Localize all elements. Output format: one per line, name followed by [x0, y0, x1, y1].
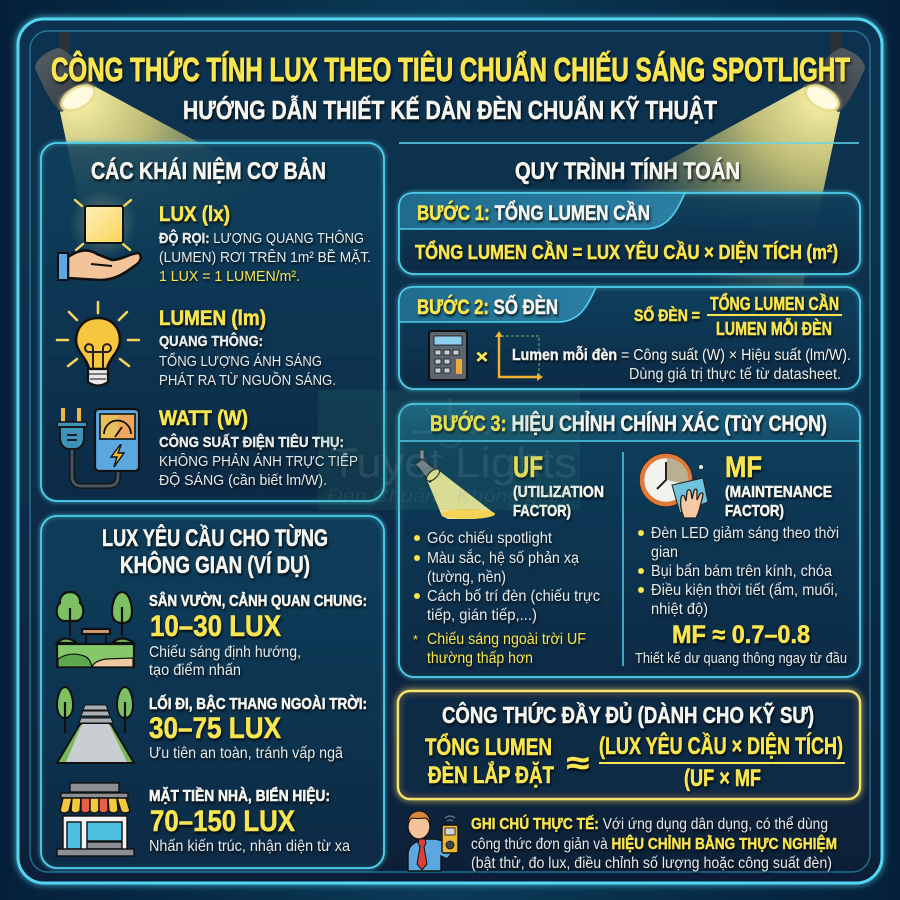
- multiply sign: ×: [476, 347, 488, 367]
- icon: axes: [495, 331, 543, 381]
- step 3 heading: BƯỚC 3: HIỆU CHỈNH CHÍNH XÁC (TùY CHỌN): [430, 411, 827, 436]
- text: MF factor: MF: [725, 451, 762, 484]
- step 2 formula: [634, 293, 842, 339]
- right spotlight beam: [480, 86, 840, 300]
- watermark: Đèn Chuẩn - Không gian: [327, 486, 567, 506]
- heading: required lux: LUX YÊU CẦU CHO TỪNG: [102, 524, 328, 552]
- watermark: Tuyet Lights: [330, 439, 577, 486]
- right spotlight fixture: [801, 32, 865, 116]
- icon: clock being wiped: [639, 453, 708, 518]
- text: lumen definition: PHÁT RA TỪ NGUỒN SÁNG.: [159, 371, 336, 389]
- step 2 lumen per lamp note: [512, 345, 851, 383]
- text: watt definition: ĐỘ SÁNG (cần biết lm/W).: [159, 472, 327, 489]
- text: facade lux: [149, 787, 350, 855]
- text: facade lux: Nhấn kiến trúc, nhận diện từ xa: [149, 838, 350, 855]
- list: UF items: *: [413, 632, 418, 647]
- text: lumen definition: QUANG THÔNG:: [159, 332, 263, 350]
- list: UF items: Góc chiếu spotlight: [427, 530, 553, 547]
- panel: basic concepts: [41, 143, 384, 501]
- left spotlight beam: [60, 86, 420, 300]
- list: UF items: (tường, nền): [427, 569, 506, 586]
- text: garden lux: 10–30 LUX: [150, 610, 281, 643]
- approximately sign: ≈: [567, 747, 589, 780]
- text: garden lux: SÂN VƯỜN, CẢNH QUAN CHUNG:: [149, 592, 367, 610]
- text: facade lux: 70–150 LUX: [150, 805, 295, 838]
- heading: basic concepts: CÁC KHÁI NIỆM CƠ BẢN: [91, 156, 326, 185]
- text: lux definition: [159, 203, 371, 285]
- practical note: công thức đơn giản và HIỆU CHỈNH BẰNG THỰC NGHIỆM: [471, 835, 837, 853]
- text: watt definition: CÔNG SUẤT ĐIỆN TIÊU THỤ:: [159, 433, 344, 451]
- practical note: [471, 815, 837, 872]
- list: MF items: Đèn LED giảm sáng theo thời: [651, 525, 839, 542]
- icon: plug and power meter: [57, 408, 139, 486]
- text: MF factor: (MAINTENANCE: [725, 484, 832, 501]
- text: lumen definition: [159, 307, 336, 389]
- full formula left side: [425, 733, 554, 789]
- text: watt definition: KHÔNG PHẢN ÁNH TRỰC TIẾP: [159, 453, 358, 470]
- text: lux definition: LUX (lx): [159, 203, 230, 226]
- list: UF items: Chiếu sáng ngoài trời UF: [427, 631, 586, 648]
- icon: light on hand: [58, 190, 141, 280]
- step 2 formula: TỔNG LUMEN CẦN: [710, 293, 839, 314]
- icon: engineer with lux meter: [408, 811, 458, 871]
- icon: outdoor path and stairs: [57, 687, 134, 763]
- full formula left side: TỔNG LUMEN: [425, 733, 552, 761]
- text: lux definition: 1 LUX = 1 LUMEN/m².: [159, 268, 300, 285]
- icon: storefront: [57, 783, 134, 856]
- panel: full formula: [398, 691, 860, 799]
- text: garden lux: Chiếu sáng định hướng,: [149, 644, 301, 661]
- step 1 header tab: [399, 193, 685, 229]
- practical note: (bật thử, đo lux, điều chỉnh số lượng hoặc công suất đèn): [471, 855, 832, 872]
- text: path lux: 30–75 LUX: [149, 712, 281, 745]
- full formula fraction: (UF × MF: [684, 765, 761, 792]
- subtitle: HƯỚNG DẪN THIẾT KẾ DÀN ĐÈN CHUẨN KỸ THUẬT: [183, 95, 717, 125]
- text: watt definition: WATT (W): [159, 407, 248, 430]
- step 2 header tab: [399, 287, 596, 322]
- text: path lux: Ưu tiên an toàn, tránh vấp ngã: [149, 745, 343, 762]
- watermark: [318, 390, 580, 510]
- practical note: GHI CHÚ THỰC TẾ: Với ứng dụng dân dụng, có thể dùng: [471, 815, 828, 833]
- text: MF factor: [725, 451, 832, 520]
- full formula heading: CÔNG THỨC ĐẦY ĐỦ (DÀNH CHO KỸ SƯ): [442, 700, 814, 728]
- text: lumen definition: TỔNG LƯỢNG ÁNH SÁNG: [159, 352, 322, 370]
- heading: required lux: KHÔNG GIAN (VÍ DỤ): [120, 551, 310, 579]
- MF design note: Thiết kế dư quang thông ngay từ đầu: [635, 651, 847, 667]
- step 2 heading: BƯỚC 2: SỐ ĐÈN: [417, 295, 558, 319]
- list: UF items: Màu sắc, hệ số phản xạ: [427, 548, 579, 567]
- icon: light bulb: [57, 302, 139, 386]
- list: MF items: gian: [651, 544, 678, 561]
- header divider above process column: [399, 142, 859, 144]
- left spotlight fixture: [35, 32, 99, 116]
- list: UF items: Cách bố trí đèn (chiếu trực: [427, 588, 600, 605]
- icon: garden: [57, 592, 134, 667]
- text: path lux: LỐI ĐI, BẬC THANG NGOÀI TRỜI:: [149, 695, 367, 713]
- text: watt definition: [159, 407, 358, 489]
- text: UF factor: (UTILIZATION: [513, 484, 604, 501]
- panel: step 2: [399, 287, 860, 389]
- step 2 lumen per lamp note: Lumen mỗi đèn = Công suất (W) × Hiệu suất (lm/W).: [512, 345, 851, 364]
- text: lux definition: ĐỘ RỌI: LƯỢNG QUANG THÔNG: [159, 229, 364, 247]
- text: garden lux: [149, 592, 367, 679]
- text: lux definition: (LUMEN) RƠI TRÊN 1m² BỀ MẶT.: [159, 249, 371, 266]
- text: lumen definition: LUMEN (lm): [159, 307, 266, 330]
- text: garden lux: tạo điểm nhấn: [149, 661, 241, 679]
- heading: calculation process: QUY TRÌNH TÍNH TOÁN: [515, 157, 740, 185]
- list: UF items: [413, 530, 600, 667]
- text: path lux: [149, 695, 367, 762]
- step 2 formula: SỐ ĐÈN =: [634, 305, 700, 325]
- list: MF items: nhiệt độ): [651, 601, 708, 618]
- list: MF items: Bụi bẩn bám trên kính, chóa: [651, 562, 832, 580]
- text: UF factor: [513, 451, 604, 520]
- step 2 formula: LUMEN MỖI ĐÈN: [716, 318, 832, 339]
- heading: required lux: [102, 524, 328, 579]
- full formula left side: ĐÈN LẮP ĐẶT: [428, 761, 554, 789]
- list: UF items: thường thấp hơn: [427, 650, 533, 667]
- step 3 header band: [400, 405, 859, 441]
- text: facade lux: MẶT TIỀN NHÀ, BIỂN HIỆU:: [149, 787, 330, 805]
- list: MF items: [638, 525, 839, 618]
- icon: UF spotlight: [415, 450, 495, 519]
- icon: calculator: [429, 331, 467, 380]
- panel: step 1: [399, 193, 860, 274]
- text: UF factor: FACTOR): [513, 503, 571, 520]
- MF value: MF ≈ 0.7–0.8: [672, 621, 810, 649]
- panel: required lux per space: [41, 516, 384, 868]
- text: UF factor: UF: [513, 451, 543, 484]
- list: UF items: tiếp, gián tiếp,...): [427, 607, 537, 624]
- text: MF factor: FACTOR): [725, 503, 784, 520]
- full formula fraction: [599, 732, 845, 792]
- list: MF items: Điều kiện thời tiết (ẩm, muối,: [651, 581, 838, 599]
- step 1 heading: BƯỚC 1: TỔNG LUMEN CẦN: [417, 201, 650, 225]
- step 2 lumen per lamp note: Dùng giá trị thực tế từ datasheet.: [629, 366, 841, 383]
- panel: step 3: [399, 404, 860, 677]
